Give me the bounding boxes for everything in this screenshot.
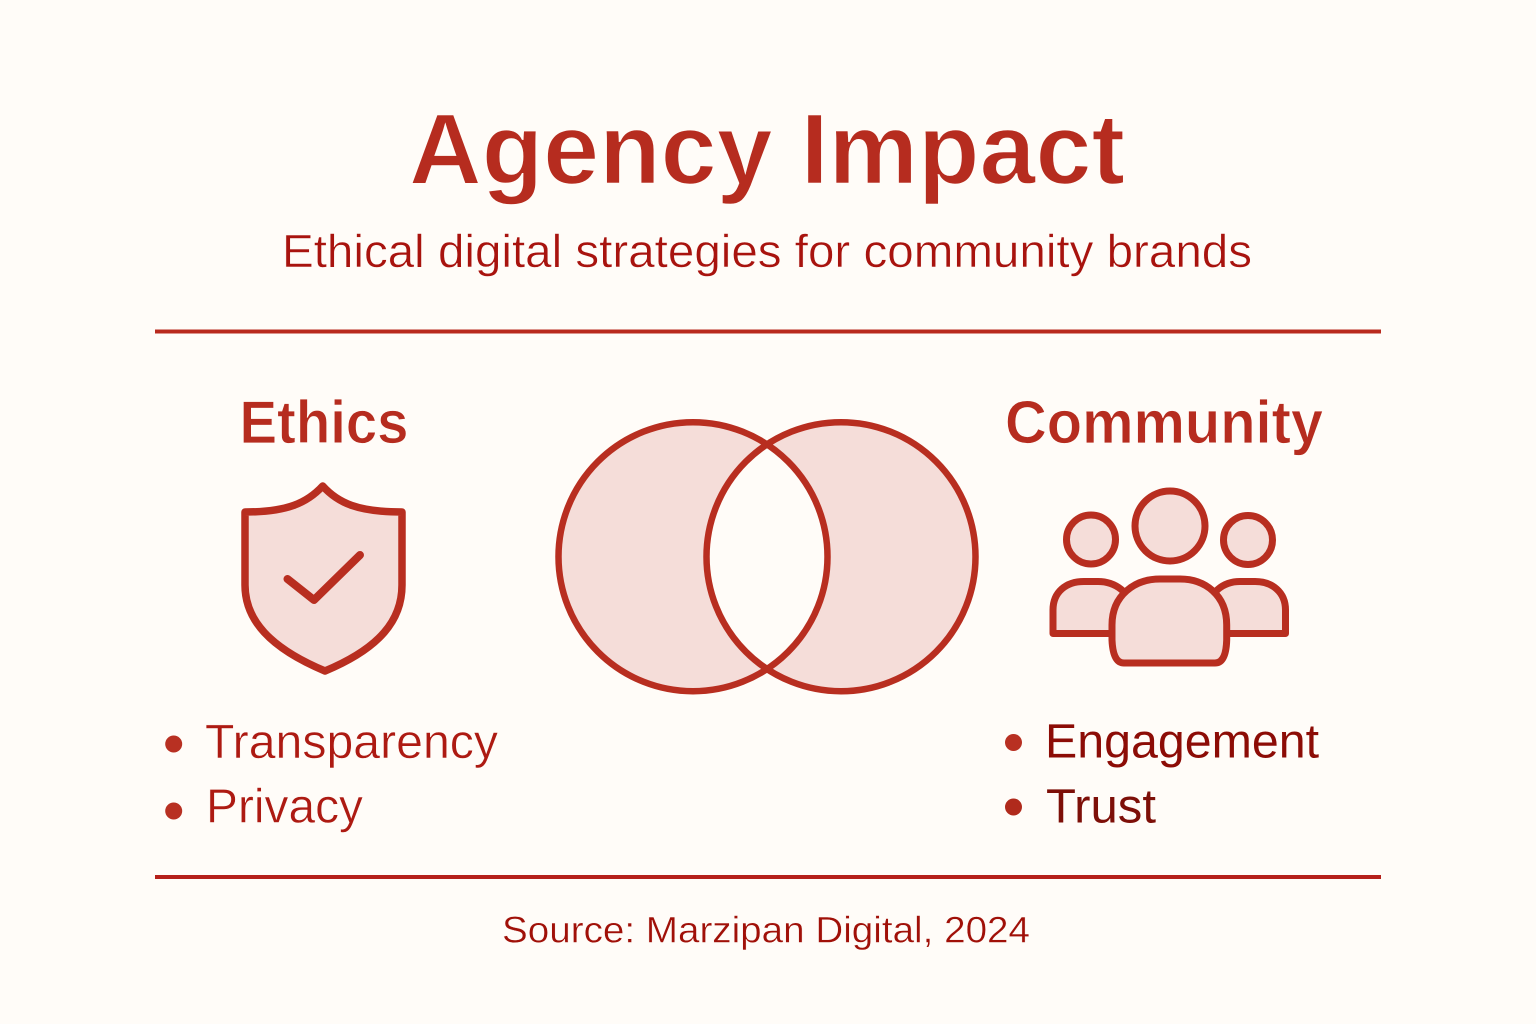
heading: Ethics: Ethics <box>240 389 408 456</box>
subtitle: Ethical digital strategies for community brands <box>282 225 1252 277</box>
list: ethics items <box>165 716 498 834</box>
list: community items <box>1005 716 1319 833</box>
source note: Source: Marzipan Digital, 2024 <box>502 909 1030 950</box>
list: ethics items: Privacy <box>206 780 363 834</box>
list: ethics items: Transparency <box>205 716 498 769</box>
heading: Community: Community <box>1005 389 1324 456</box>
venn diagram <box>558 422 976 691</box>
list: community items: Trust <box>1046 780 1156 833</box>
icon: community people <box>1053 491 1286 663</box>
list: community items: Engagement <box>1045 716 1319 768</box>
icon: shield with check <box>245 486 402 671</box>
title: Agency Impact <box>409 94 1125 206</box>
